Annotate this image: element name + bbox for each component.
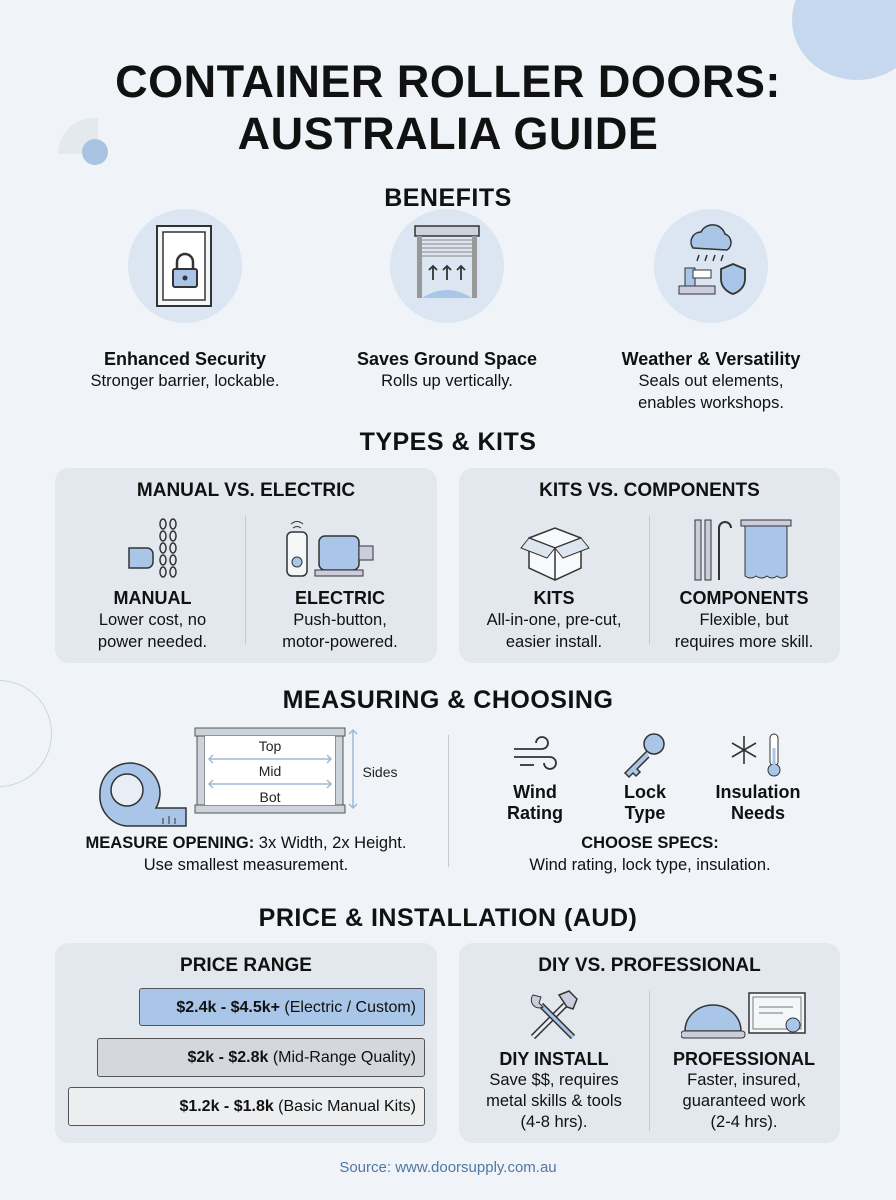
label: electric: motor-powered. [282,633,398,651]
label: professional [673,1049,815,1131]
label: professional: (2-4 hrs). [711,1113,777,1131]
panel title: PRICE RANGE [180,955,312,976]
icon: box [520,527,590,581]
heading: benefits: BENEFITS [384,184,512,212]
icon: snow thermometer [732,734,780,776]
benefit: ground space: Rolls up vertically. [381,372,513,390]
decor: small circle [82,139,108,165]
label: components: requires more skill. [675,633,813,651]
benefit: security: Enhanced Security [104,349,266,369]
decor: top right circle [792,0,896,80]
diagram: measure opening: Top [259,738,281,754]
benefit: ground space: Saves Ground Space [357,349,537,369]
label: professional: guaranteed work [683,1092,805,1110]
heading: types & kits: TYPES & KITS [360,428,536,456]
label: kits [486,588,621,651]
bar: basic [68,1087,425,1126]
label: components: Flexible, but [700,611,788,629]
label: manual: power needed. [98,633,207,651]
diagram: measure opening: Sides [362,764,398,780]
text: Insulation [716,782,800,802]
label: kits: All-in-one, pre-cut, [487,611,621,629]
label: diy: Save $$, requires [489,1071,619,1089]
label: components: COMPONENTS [679,588,808,608]
bar: electric: $2.4k - $4.5k+ (Electric / Custom) [176,999,416,1016]
diagram: measure opening: Mid [259,763,281,779]
label: kits: KITS [533,588,574,608]
decor: ring left [0,680,52,787]
label: professional: PROFESSIONAL [673,1049,815,1069]
icon: chain hand [128,518,177,578]
label: manual: MANUAL [114,588,192,608]
text: choose specs: CHOOSE SPECS: [581,834,719,852]
benefit: ground space [357,209,537,390]
decor: left shape [58,118,98,154]
label: diy: (4-8 hrs). [521,1113,587,1131]
icon: tools [530,990,578,1040]
panel title: KITS VS. COMPONENTS [539,480,760,501]
panel: diy vs professional [459,943,840,1143]
text: measure opening: Use smallest measurement. [144,856,348,874]
panel title: MANUAL VS. ELECTRIC [137,480,355,501]
text: measure opening: MEASURE OPENING: 3x Width, 2x Height. [86,834,406,852]
label: components [675,588,813,651]
title: AUSTRALIA GUIDE [238,108,658,159]
labels: specs: Rating [507,803,563,823]
benefit: weather [622,209,800,412]
benefit: weather: Seals out elements, [639,372,783,390]
benefit: security [91,209,279,390]
benefit: security: Stronger barrier, lockable. [91,372,279,390]
bar: basic: $1.2k - $1.8k (Basic Manual Kits) [179,1098,416,1115]
label: professional: Faster, insured, [687,1071,801,1089]
text: measure opening [86,834,406,874]
title [115,56,781,159]
text: Type [625,803,665,823]
label: manual: Lower cost, no [99,611,206,629]
panel: kits vs components [459,468,840,663]
panel: manual vs electric [55,468,437,663]
label: diy [486,1049,622,1131]
label: electric: ELECTRIC [295,588,385,608]
label: diy: metal skills & tools [486,1092,622,1110]
icon: wind [514,736,557,770]
icon: components [694,520,792,580]
icon: hard hat certificate [681,992,806,1038]
benefit: weather: Weather & Versatility [622,349,800,369]
heading: price: PRICE & INSTALLATION (AUD) [259,904,637,932]
label: electric: Push-button, [293,611,387,629]
text: choose specs [529,834,771,874]
panel title: DIY VS. PROFESSIONAL [538,955,761,976]
source: Source: www.doorsupply.com.au [339,1159,557,1176]
panel: price range [55,943,437,1143]
label: electric [282,588,398,651]
text: Needs [731,803,785,823]
bar: mid: $2k - $2.8k (Mid-Range Quality) [187,1049,416,1066]
text: Lock [624,782,666,802]
icon: key [624,733,665,778]
benefit: weather: enables workshops. [638,394,784,412]
diagram: measure opening [99,728,398,827]
heading: measuring: MEASURING & CHOOSING [283,686,613,714]
labels: specs [507,782,563,823]
labels: specs: Wind [513,782,557,802]
title: CONTAINER ROLLER DOORS: [115,56,781,107]
label: manual [98,588,207,651]
icon: remote motor [286,521,374,577]
diagram: measure opening: Bot [259,789,281,805]
bar: electric [139,988,425,1026]
label: kits: easier install. [506,633,602,651]
bar: mid [97,1038,425,1077]
label: diy: DIY INSTALL [499,1049,609,1069]
text: choose specs: Wind rating, lock type, insulation. [529,856,771,874]
